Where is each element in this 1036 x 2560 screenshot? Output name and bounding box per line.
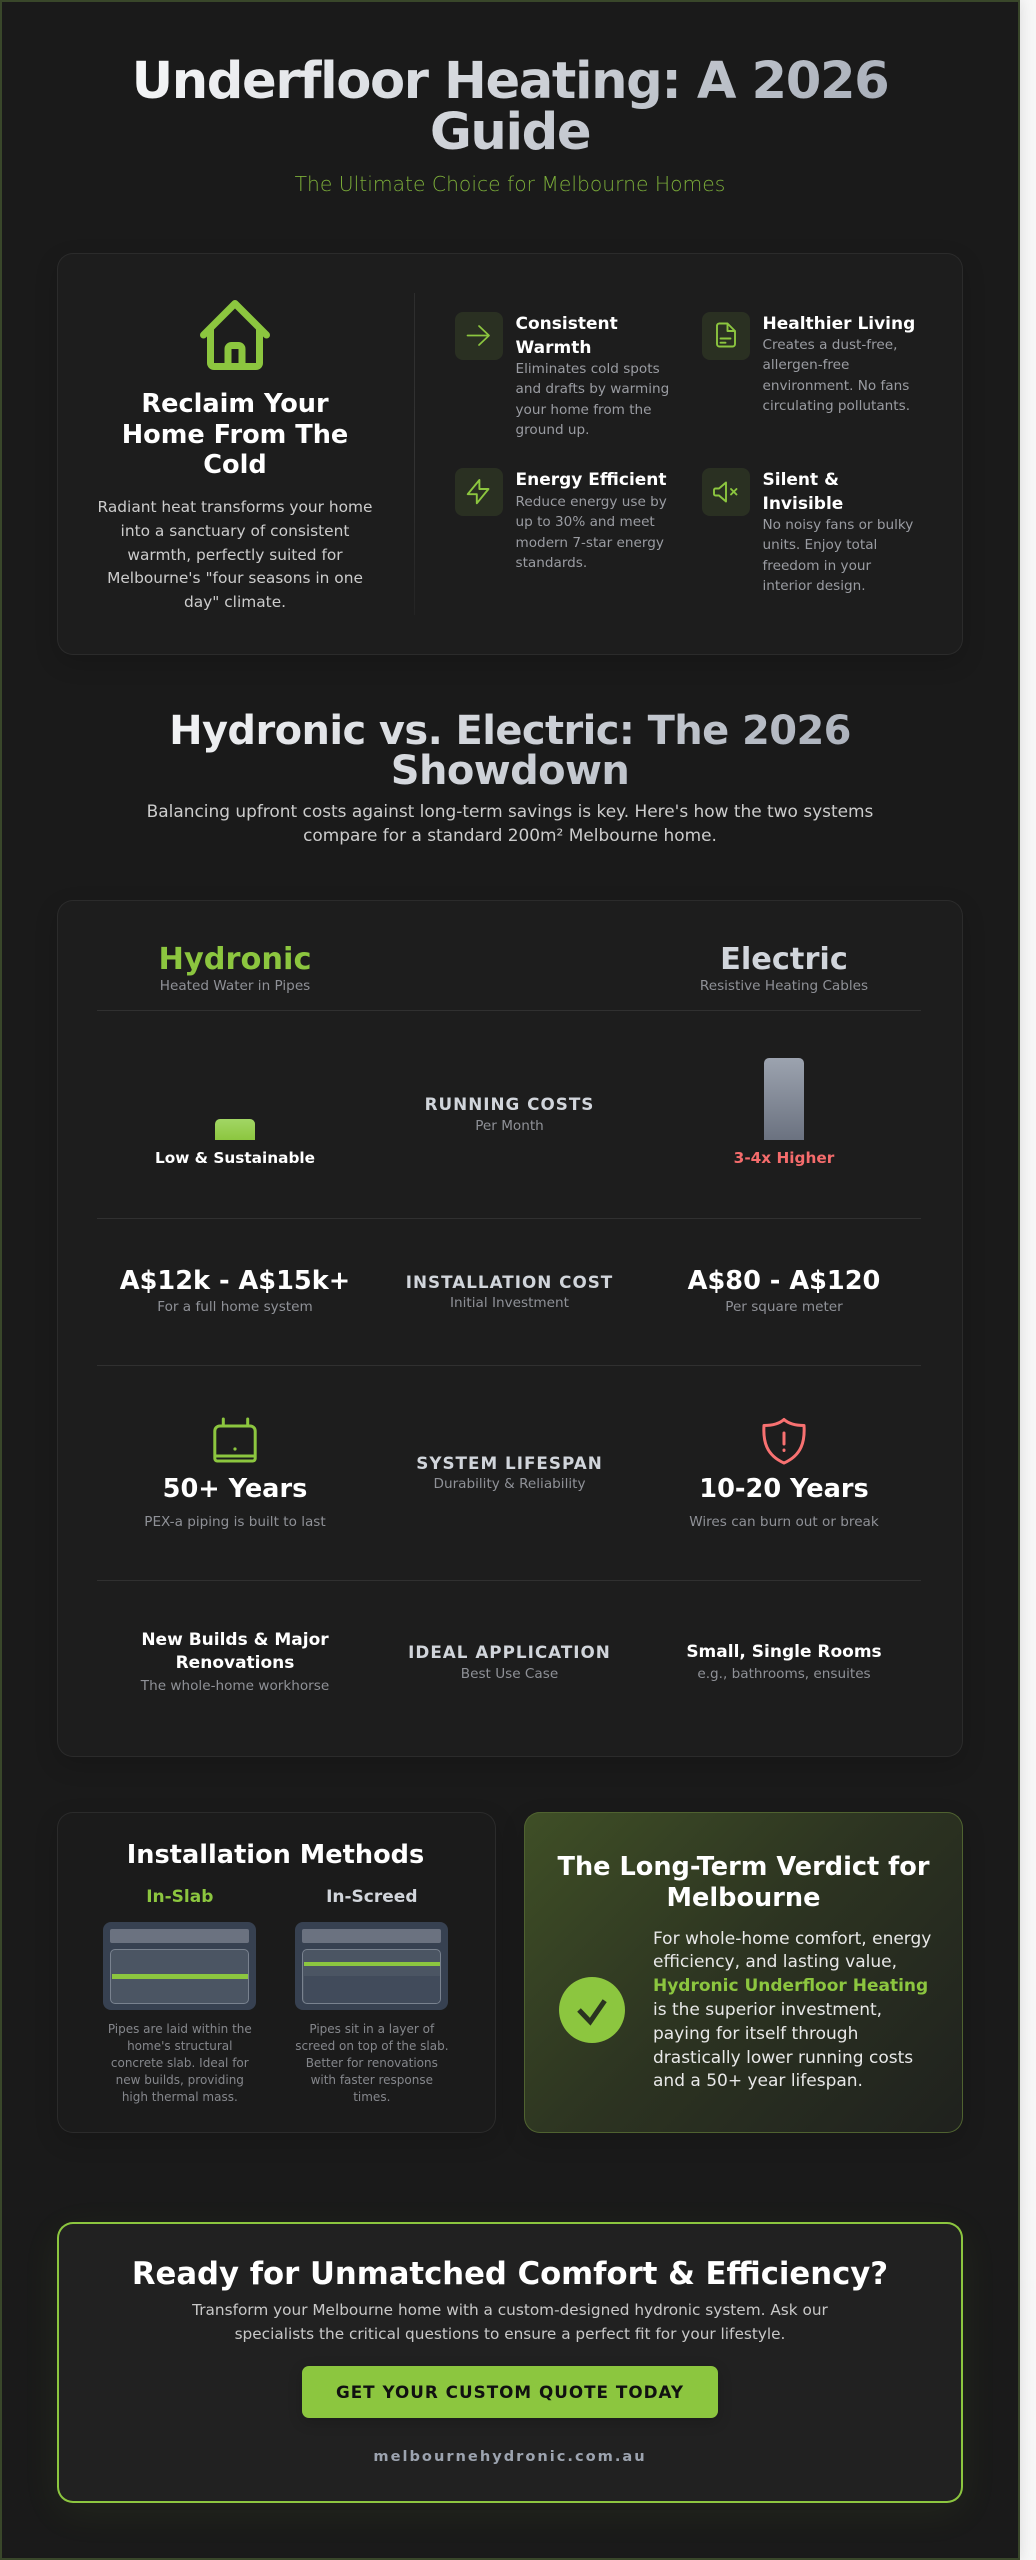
feature text: units. Enjoy total: [762, 537, 877, 553]
electric lifespan: [689, 1418, 879, 1530]
metric qualifier: Best Use Case: [461, 1666, 558, 1682]
method description: Pipes sit in a layer of: [309, 2022, 434, 2036]
hydronic application: [140, 1630, 329, 1694]
bar: electric: [764, 1058, 804, 1140]
method description: [108, 2022, 252, 2104]
feature text: [762, 517, 913, 594]
metric name: SYSTEM LIFESPAN: [416, 1453, 603, 1473]
qualifier: The whole-home workhorse: [141, 1678, 329, 1694]
feature title: [516, 314, 618, 358]
feature: consistent warmth: [455, 312, 669, 438]
diagram: in-screed layers: [295, 1922, 448, 2010]
heading: reclaim: Reclaim Your: [141, 389, 329, 419]
feature text: [516, 494, 667, 571]
hydronic descriptor: Heated Water in Pipes: [160, 978, 310, 994]
metric qualifier: Per Month: [475, 1118, 544, 1134]
method description: Better for renovations: [306, 2056, 438, 2070]
method description: times.: [353, 2090, 390, 2104]
value: Renovations: [176, 1653, 294, 1673]
panel: comparison table: [57, 900, 963, 1757]
icon: check circle: [559, 1977, 625, 2043]
icon: calendar: [213, 1418, 257, 1462]
value: [141, 1630, 329, 1673]
feature text: your home from the: [516, 402, 652, 418]
panel: long-term verdict: [524, 1812, 963, 2133]
heading: reclaim: Cold: [203, 450, 267, 480]
feature text: No noisy fans or bulky: [762, 517, 913, 533]
qualifier: PEX-a piping is built to last: [144, 1514, 326, 1530]
feature title: Warmth: [516, 338, 591, 358]
verdict text: and a 50+ year lifespan.: [653, 2071, 863, 2091]
heading: verdict: Melbourne: [667, 1882, 820, 1912]
icon: house: [200, 300, 270, 370]
feature title: Consistent: [516, 314, 618, 334]
feature text: Reduce energy use by: [516, 494, 667, 510]
column header: electric: [700, 942, 868, 994]
value: New Builds & Major: [141, 1630, 329, 1650]
hydronic name: Hydronic: [159, 942, 311, 977]
text: section intro: [147, 801, 873, 845]
method description: high thermal mass.: [122, 2090, 238, 2104]
diagram: in-slab layers: [103, 1922, 256, 2010]
feature title: Healthier Living: [762, 314, 915, 334]
panel: call to action: [57, 2222, 963, 2503]
metric name: RUNNING COSTS: [425, 1094, 594, 1114]
text: radiant heat: warmth, perfectly suited for: [127, 546, 343, 564]
feature title: Invisible: [762, 494, 843, 514]
method description: Pipes are laid within the: [108, 2022, 252, 2036]
electric descriptor: Resistive Heating Cables: [700, 978, 868, 994]
feature text: interior design.: [762, 578, 866, 594]
value: 10-20 Years: [699, 1474, 869, 1504]
feature text: up to 30% and meet: [516, 514, 655, 530]
icon: document: [702, 312, 750, 360]
metric qualifier: Durability & Reliability: [434, 1476, 586, 1492]
feature text: allergen-free: [762, 357, 849, 373]
method name: In-Screed: [326, 1887, 418, 1907]
feature: energy efficient: [455, 468, 667, 571]
heading: hydronic vs electric: Showdown: [391, 748, 629, 794]
heading: verdict: [558, 1852, 930, 1912]
application label: [408, 1642, 611, 1682]
feature text: and drafts by warming: [516, 381, 669, 397]
heading: reclaim: [122, 389, 348, 480]
method description: new builds, providing: [116, 2072, 244, 2086]
heading: installation methods: Installation Methods: [127, 1840, 424, 1870]
row: system lifespan: [144, 1418, 879, 1530]
button: [302, 2366, 718, 2418]
verdict text: drastically lower running costs: [653, 2048, 913, 2068]
metric qualifier: Initial Investment: [450, 1295, 569, 1311]
electric install cost: [688, 1266, 880, 1315]
text: section intro: compare for a standard 200m² Melbourne home.: [303, 825, 717, 845]
method description: with faster response: [311, 2072, 433, 2086]
label: 3-4x higher: 3-4x Higher: [734, 1149, 834, 1167]
running costs label: [425, 1094, 594, 1134]
text: transform: specialists the critical questions to ensure a perfect fit for your lifestyle.: [235, 2325, 785, 2343]
metric name: IDEAL APPLICATION: [408, 1642, 611, 1662]
text: radiant heat: day" climate.: [184, 593, 286, 611]
hydronic running cost: [155, 1119, 315, 1167]
feature text: Creates a dust-free,: [762, 337, 897, 353]
feature text: Eliminates cold spots: [516, 361, 660, 377]
electric name: Electric: [720, 942, 848, 977]
text: section intro: Balancing upfront costs against long-term savings is key. Here's how the two systems: [147, 801, 873, 821]
text: transform: [57, 2298, 963, 2346]
feature: silent and invisible: [702, 468, 913, 594]
title: Guide: [430, 102, 590, 162]
text: radiant heat: [97, 498, 373, 611]
method: in-slab: [103, 1887, 256, 2104]
feature: healthier living: [702, 312, 915, 414]
value: 50+ Years: [163, 1474, 307, 1504]
qualifier: Wires can burn out or break: [689, 1514, 879, 1530]
feature title: [762, 470, 843, 514]
installation cost label: [406, 1272, 613, 1311]
qualifier: For a full home system: [157, 1299, 313, 1315]
button: GET YOUR CUSTOM QUOTE TODAY: [336, 2382, 684, 2402]
electric application: [686, 1642, 882, 1682]
method description: screed on top of the slab.: [295, 2038, 449, 2052]
row: installation cost: [120, 1266, 880, 1315]
metric name: INSTALLATION COST: [406, 1272, 613, 1292]
method: in-screed: [295, 1887, 449, 2104]
heading: ready: Ready for Unmatched Comfort & Efficiency?: [132, 2257, 888, 2292]
verdict text: efficiency, and lasting value,: [653, 1952, 897, 1972]
feature text: modern 7-star energy: [516, 535, 664, 551]
heading: hydronic vs electric: Hydronic vs. Electric: The 2026: [169, 708, 851, 754]
method description: home's structural: [127, 2038, 232, 2052]
title: [57, 56, 963, 158]
feature text: [762, 337, 910, 414]
value: A$80 - A$120: [688, 1266, 880, 1296]
feature text: [516, 361, 669, 438]
method description: concrete slab. Ideal for: [111, 2056, 249, 2070]
column header: hydronic: [159, 942, 311, 994]
title: Underfloor Heating: A 2026: [132, 51, 888, 111]
subtitle: The Ultimate Choice for Melbourne Homes: [295, 172, 725, 196]
icon: lightning bolt: [455, 468, 503, 516]
icon: warning shield: [762, 1418, 806, 1464]
row: running costs: [155, 1058, 834, 1167]
heading: verdict: The Long-Term Verdict for: [558, 1852, 930, 1882]
icon: muted speaker: [702, 468, 750, 516]
hydronic install cost: [120, 1266, 350, 1315]
text: radiant heat: Radiant heat transforms your home: [97, 498, 373, 516]
feature title: Energy Efficient: [516, 470, 667, 490]
verdict text: is the superior investment,: [653, 2000, 882, 2020]
feature text: circulating pollutants.: [762, 398, 910, 414]
panel: reclaim your home: [57, 253, 963, 655]
heading: reclaim: Home From The: [122, 420, 348, 450]
electric running cost: [734, 1058, 834, 1167]
method name: In-Slab: [146, 1887, 213, 1907]
verdict text: Hydronic Underfloor Heating: [653, 1976, 928, 1996]
heading: hydronic vs electric: [57, 710, 963, 792]
feature text: ground up.: [516, 422, 589, 438]
value: A$12k - A$15k+: [120, 1266, 350, 1296]
text: transform: Transform your Melbourne home with a custom-designed hydronic system. Ask our: [192, 2301, 828, 2319]
website: melbournehydronic.com.au: [373, 2448, 647, 2465]
feature title: Silent &: [762, 470, 839, 490]
text: radiant heat: Melbourne's "four seasons in one: [107, 569, 363, 587]
feature text: environment. No fans: [762, 378, 909, 394]
qualifier: Per square meter: [725, 1299, 843, 1315]
verdict text: [653, 1928, 931, 2094]
verdict text: paying for itself through: [653, 2024, 858, 2044]
value: Small, Single Rooms: [686, 1642, 882, 1662]
method description: [295, 2022, 449, 2104]
verdict text: For whole-home comfort, energy: [653, 1929, 931, 1949]
feature text: freedom in your: [762, 558, 871, 574]
text: radiant heat: into a sanctuary of consistent: [121, 522, 349, 540]
lifespan label: [416, 1453, 603, 1492]
bar: hydronic: [215, 1119, 255, 1140]
qualifier: e.g., bathrooms, ensuites: [697, 1666, 871, 1682]
row: ideal application: [140, 1630, 882, 1694]
hydronic lifespan: [144, 1418, 326, 1530]
feature text: standards.: [516, 555, 587, 571]
icon: arrow: [455, 312, 503, 360]
panel: installation methods: [57, 1812, 496, 2133]
label: low and sustainable: Low & Sustainable: [155, 1149, 315, 1167]
